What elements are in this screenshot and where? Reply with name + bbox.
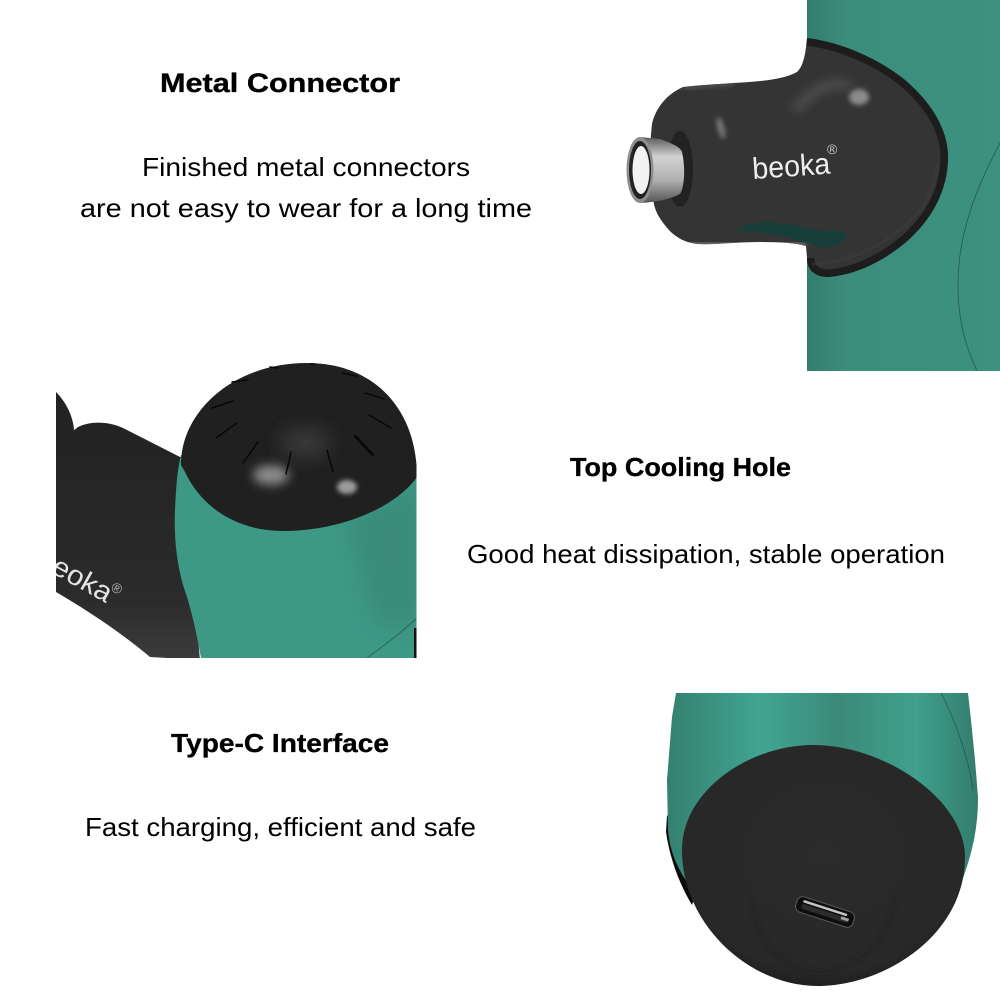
image panel: type-c product view bbox=[666, 693, 978, 986]
text block: metal connector description: Finished metal connectors bbox=[142, 152, 470, 182]
heading: Top Cooling Hole: Top Cooling Hole bbox=[570, 452, 791, 482]
type-C port bbox=[794, 895, 856, 929]
black arm bbox=[56, 423, 200, 660]
text block: metal connector description bbox=[80, 152, 532, 223]
black base bbox=[682, 745, 965, 986]
cooling slots bbox=[212, 364, 391, 474]
bottom-right black sliver bbox=[414, 628, 416, 658]
registered mark on arm: ® bbox=[109, 579, 126, 598]
black rear edge bbox=[666, 815, 693, 905]
body seam bbox=[941, 693, 973, 790]
highlights bbox=[849, 89, 869, 105]
dome highlights bbox=[253, 465, 289, 485]
text block: metal connector description: are not easy to wear for a long time bbox=[80, 193, 532, 223]
teal device body bbox=[807, 0, 1000, 371]
metal connector bbox=[626, 131, 693, 207]
image panel: top cooling hole product view bbox=[47, 363, 420, 660]
beoka logo: ® bbox=[827, 141, 838, 157]
teal body shading bbox=[354, 494, 416, 622]
teal body bbox=[175, 455, 417, 658]
heading: Metal Connector: Metal Connector bbox=[160, 68, 401, 98]
dark lower recess with teal reflection bbox=[733, 222, 846, 247]
image panel: metal connector product view bbox=[626, 0, 1000, 371]
lower seam bbox=[367, 618, 417, 658]
black connector housing bbox=[650, 38, 948, 277]
heading: Type-C Interface: Type-C Interface bbox=[171, 728, 389, 758]
teal body bbox=[667, 693, 978, 880]
arm logo text: eoka bbox=[47, 550, 118, 608]
beoka logo: beoka bbox=[751, 148, 832, 186]
body seam line bbox=[958, 143, 1000, 371]
text block: type-c description: Fast charging, efficient and safe bbox=[85, 812, 476, 842]
black dome top bbox=[181, 363, 417, 531]
flange ridge bbox=[812, 262, 816, 265]
text block: cooling description: Good heat dissipation, stable operation bbox=[467, 539, 945, 569]
inner base contour bbox=[752, 895, 895, 972]
rear black knob bbox=[56, 392, 74, 442]
